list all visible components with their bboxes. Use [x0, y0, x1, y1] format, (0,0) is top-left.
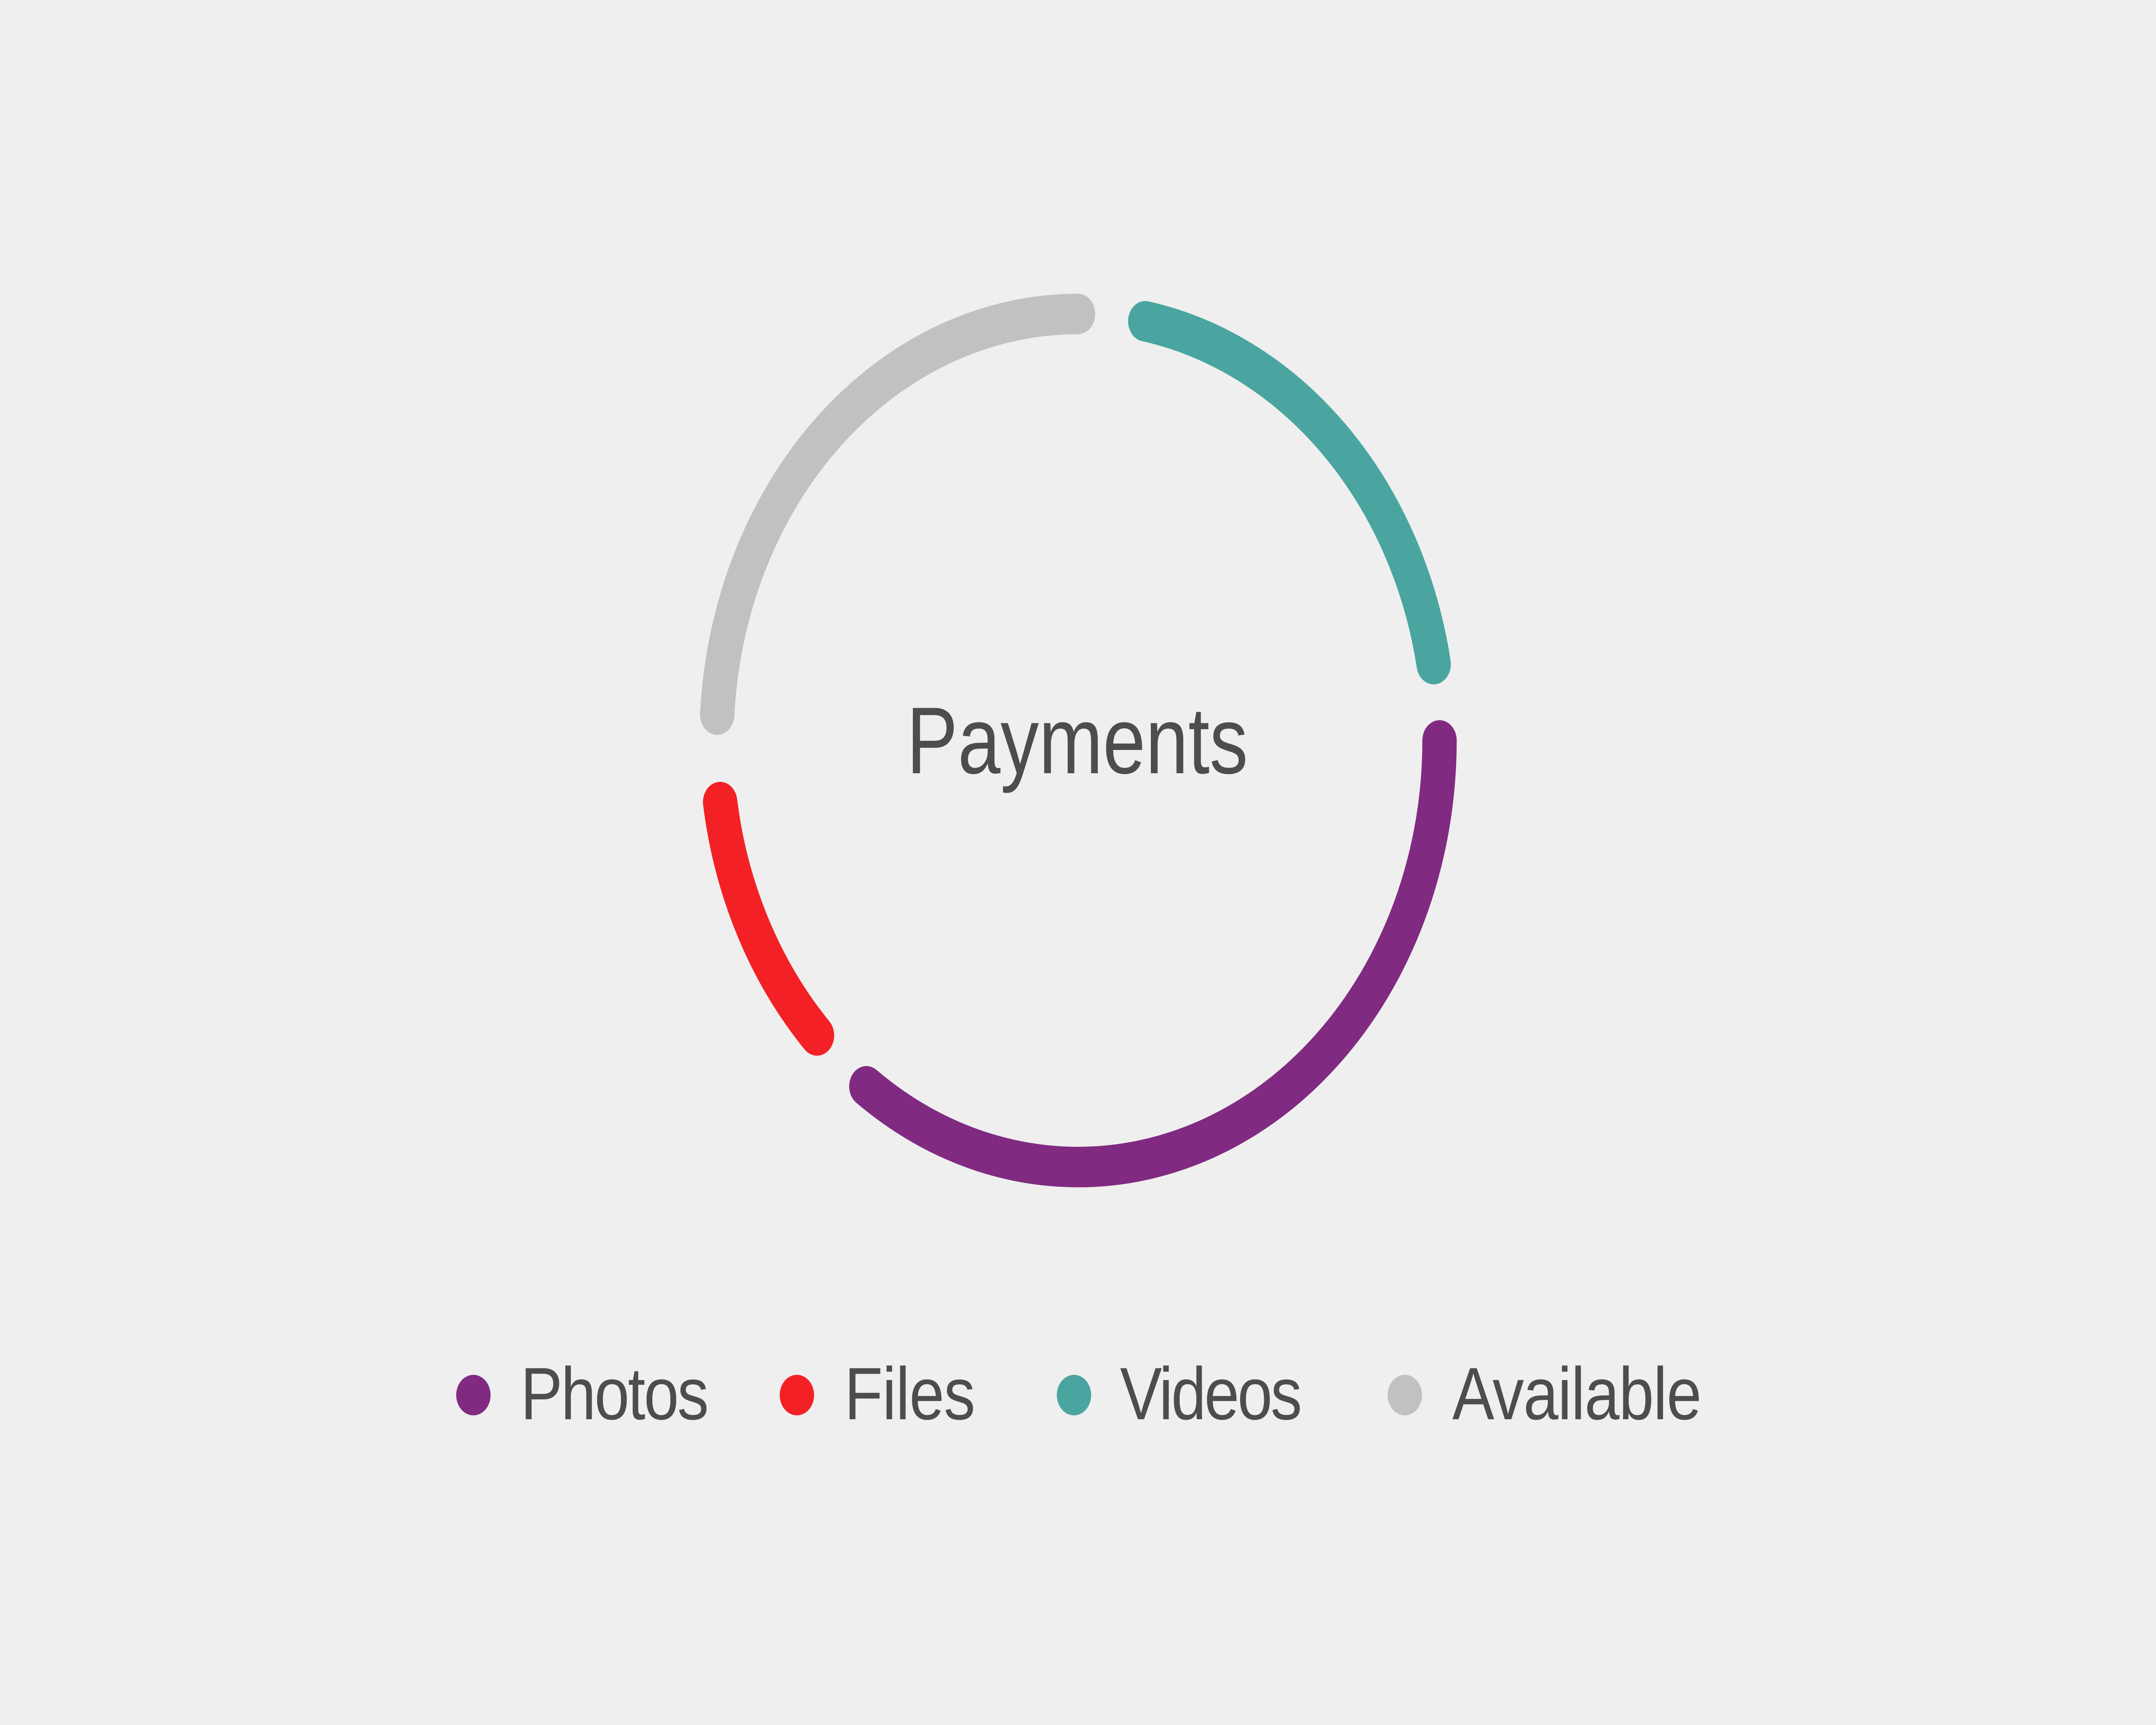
legend item: Available: Available — [1452, 1352, 1702, 1435]
legend — [456, 1352, 1702, 1435]
legend item: Videos: Videos — [1120, 1352, 1302, 1435]
legend item: Files — [780, 1352, 975, 1435]
donut chart — [717, 314, 1439, 1167]
segment: Files — [720, 802, 817, 1035]
segment: Photos — [866, 740, 1439, 1167]
legend item: Files: Files — [844, 1352, 975, 1435]
segment: Available — [717, 314, 1078, 715]
legend item: Photos: Photos — [520, 1352, 709, 1435]
segment: Videos — [1145, 321, 1434, 664]
center title: Payments — [906, 688, 1248, 794]
